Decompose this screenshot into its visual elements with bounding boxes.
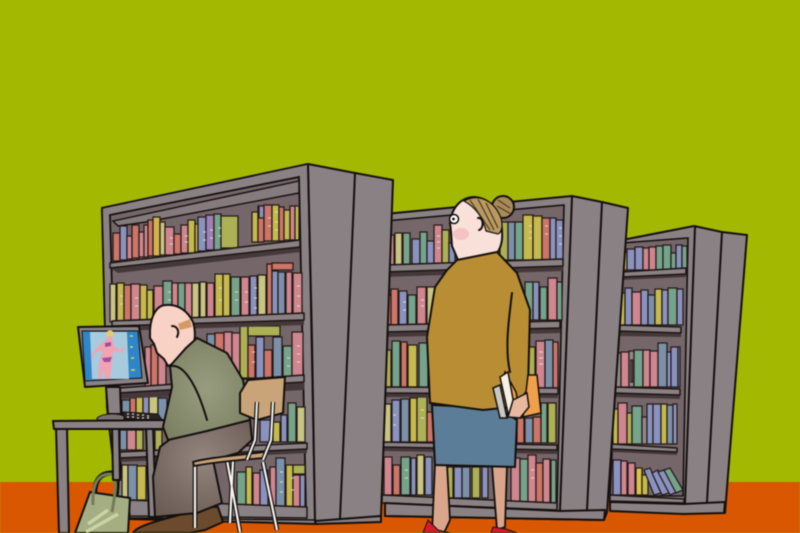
case 3 shelves <box>610 268 686 503</box>
pupil <box>452 218 455 220</box>
case 3 books row 2 <box>619 288 683 325</box>
desk <box>53 420 166 533</box>
desk middle leg <box>112 425 120 480</box>
on-screen figure <box>91 330 125 379</box>
chair back supports <box>247 402 273 460</box>
case 2 books row 2 <box>386 278 562 325</box>
orange book <box>523 375 541 417</box>
cheek <box>453 228 469 240</box>
case 3 interior <box>610 238 688 496</box>
case 2 body <box>385 196 628 520</box>
monitor stand <box>106 387 121 414</box>
case 2 shelves <box>382 259 563 510</box>
case 2 pale book marks <box>393 226 562 478</box>
keys <box>127 414 149 418</box>
case 1 books row 3 <box>145 326 303 387</box>
case 1 front frame <box>102 164 315 520</box>
ear <box>172 326 178 337</box>
case 2 books row 3 <box>384 340 558 388</box>
case 1 top plate <box>113 181 299 226</box>
figure hair <box>106 330 114 338</box>
trousers <box>153 420 252 517</box>
case 1 books row 5 <box>122 458 305 507</box>
case 1 shelves <box>110 240 307 518</box>
standing woman <box>423 196 541 533</box>
case 2 interior <box>382 205 564 507</box>
screen panel <box>90 332 129 379</box>
glasses eye <box>450 214 458 224</box>
case 3 books row 4 <box>613 403 677 444</box>
case 3 side lines <box>685 227 722 512</box>
case 3 books row 5 <box>613 460 683 495</box>
case 1 pale book marks <box>120 212 300 492</box>
shopping bag <box>75 473 130 533</box>
bag inner handle <box>93 474 116 512</box>
hair bun <box>492 196 514 218</box>
mouse pad <box>97 414 124 420</box>
skirt <box>432 405 517 467</box>
bag body <box>75 492 130 533</box>
case 1 books row 2 <box>110 263 302 322</box>
ear <box>478 218 483 230</box>
shoes <box>133 506 223 533</box>
bookcase: front left <box>102 164 393 524</box>
chair back supports highlight <box>247 402 273 460</box>
case 1 plinth <box>315 516 381 524</box>
chair backrest <box>240 377 285 420</box>
right leg <box>492 466 507 530</box>
seated man <box>133 305 252 533</box>
monitor case <box>78 326 148 387</box>
left leg <box>432 464 450 533</box>
head <box>150 305 195 366</box>
desk left leg <box>56 427 69 533</box>
sweater <box>427 252 530 410</box>
right shoe <box>491 527 517 533</box>
bag stripes <box>86 510 118 532</box>
second orange book <box>503 372 520 414</box>
case 1 books row 1 <box>113 205 299 261</box>
case 2 books row 4 <box>383 397 556 443</box>
jacket <box>163 338 250 440</box>
chair legs <box>195 460 277 532</box>
sleeve line <box>171 366 207 420</box>
screen dashes <box>130 336 135 370</box>
case 1 side lines <box>308 164 355 522</box>
figure body <box>91 336 125 379</box>
chair legs highlight <box>195 460 277 532</box>
chair <box>193 377 285 532</box>
bookcase: far right <box>610 226 747 514</box>
case 2 books row 5 <box>384 455 556 503</box>
case 2 books row 1 <box>388 215 563 265</box>
hair <box>464 198 502 234</box>
hair strands <box>470 199 511 230</box>
case 2 plinth <box>385 503 605 520</box>
case 1 books row 4 <box>120 393 305 450</box>
hand <box>508 393 529 418</box>
desk top <box>53 420 166 429</box>
keyboard <box>123 412 162 420</box>
hair stubble <box>178 319 192 330</box>
sleeve line <box>507 293 512 372</box>
case 3 books row 1 <box>623 245 687 270</box>
computer monitor <box>78 326 148 414</box>
monitor screen <box>82 331 142 381</box>
case 3 plinth <box>610 502 725 514</box>
case 2 side lines <box>560 197 602 510</box>
white book <box>500 372 515 413</box>
bookcase: middle <box>382 196 628 520</box>
case 3 body <box>610 226 747 513</box>
chair seat <box>193 452 265 466</box>
case 1 body <box>102 164 393 524</box>
left shoe <box>423 520 450 533</box>
case 3 books row 3 <box>615 343 680 387</box>
figure bikini <box>102 342 112 362</box>
head <box>450 197 502 260</box>
keyboard and mouse <box>97 412 162 420</box>
orange floor <box>0 482 800 533</box>
desk right leg <box>146 426 156 517</box>
grey book <box>493 385 507 418</box>
case 1 interior <box>110 177 306 509</box>
bag handles <box>95 473 117 512</box>
